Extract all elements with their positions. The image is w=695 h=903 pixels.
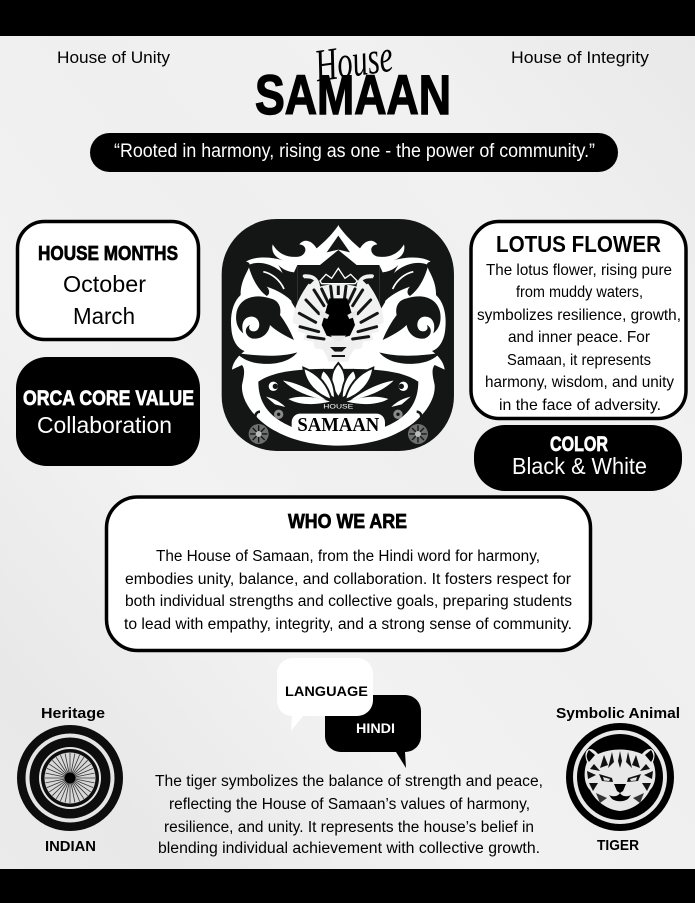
tiger description text: blending individual achievement with collective growth. <box>158 840 540 857</box>
tiger description text: reflecting the House of Samaan’s values of harmony, <box>169 796 530 813</box>
symbolic animal block <box>556 705 680 854</box>
speech bubble: language: LANGUAGE <box>285 683 368 699</box>
panel: lotus flower: in the face of adversity. <box>499 397 661 414</box>
panel: lotus flower: Samaan, it represents <box>507 352 651 369</box>
panel: who we are: The House of Samaan, from the Hindi word for harmony, <box>156 548 540 565</box>
heading: House of Unity: House of Unity <box>57 48 171 67</box>
speech bubble: hindi: HINDI <box>356 720 395 736</box>
panel: orca core value: Collaboration <box>37 412 172 438</box>
panel: color: COLOR <box>550 433 608 456</box>
house crest logo <box>222 219 454 451</box>
heading: House of Integrity: House of Integrity <box>511 48 650 67</box>
title <box>255 30 451 126</box>
panel: who we are <box>106 497 590 650</box>
heritage block: Heritage <box>41 705 105 722</box>
panel: lotus flower: from muddy waters, <box>516 284 643 301</box>
house crest logo: SAMAAN <box>297 414 380 436</box>
panel: lotus flower <box>471 222 686 418</box>
motto pill <box>90 133 618 172</box>
symbolic animal block: TIGER <box>597 837 639 854</box>
speech bubble: hindi <box>325 695 421 768</box>
tiger description text: The tiger symbolizes the balance of strength and peace, <box>155 773 543 790</box>
panel: orca core value: ORCA CORE VALUE <box>23 387 194 410</box>
panel: who we are: embodies unity, balance, and collaboration. It fosters respect for <box>125 571 571 588</box>
house crest logo: BALANCE <box>249 345 272 354</box>
panel: color <box>474 425 682 491</box>
panel: color: Black & White <box>512 453 647 479</box>
bottom black bar <box>0 869 695 903</box>
panel: orca core value <box>16 357 200 466</box>
symbolic animal block: Symbolic Animal <box>556 705 680 722</box>
speech bubble: language <box>277 658 373 731</box>
panel: who we are: both individual strengths and collective goals, preparing students <box>125 593 572 610</box>
title: SAMAAN: SAMAAN <box>255 63 451 126</box>
panel: lotus flower: The lotus flower, rising pure <box>486 262 672 279</box>
tiger description text <box>155 773 543 857</box>
icon: chakra badge <box>17 725 123 831</box>
house crest logo: HOUSE <box>323 404 353 411</box>
motto pill: “Rooted in harmony, rising as one - the power of community.” <box>114 141 595 162</box>
panel: house months: October <box>63 271 146 297</box>
panel: house months: HOUSE MONTHS <box>38 243 178 265</box>
heritage block <box>17 705 123 855</box>
panel: lotus flower: LOTUS FLOWER <box>496 231 661 257</box>
panel: house months <box>18 222 198 340</box>
panel: who we are: WHO WE ARE <box>288 511 407 533</box>
panel: lotus flower: symbolizes resilience, growth, <box>477 307 681 324</box>
panel: house months: March <box>73 303 135 329</box>
title script: House: House <box>311 30 396 91</box>
panel: who we are: to lead with empathy, integrity, and a strong sense of community. <box>124 616 572 633</box>
house crest logo: UNITY <box>407 346 427 354</box>
tiger description text: resilience, and unity. It represents the house’s belief in <box>164 819 534 836</box>
panel: lotus flower: and inner peace. For <box>508 329 651 346</box>
top black bar <box>0 0 695 36</box>
panel: lotus flower: harmony, wisdom, and unity <box>485 374 674 391</box>
heritage block: INDIAN <box>45 838 96 855</box>
icon: tiger badge <box>566 723 674 831</box>
